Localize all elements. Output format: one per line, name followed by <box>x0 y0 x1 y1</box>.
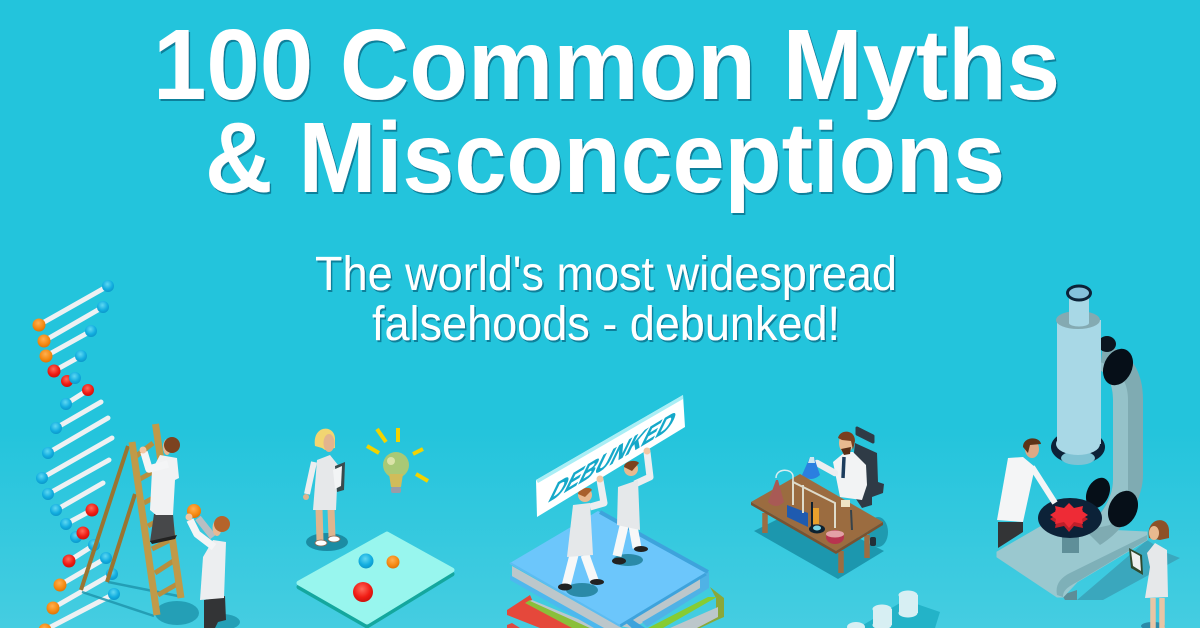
illustration: stack of books <box>507 511 724 628</box>
illustration: lab desk with scientist <box>751 428 888 579</box>
icon: light bulb <box>367 428 428 493</box>
title: 100 Common Myths <box>153 9 1060 121</box>
title: & Misconceptions <box>205 102 1005 214</box>
banner: DEBUNKED sign: DEBUNKED <box>544 403 682 509</box>
illustration: ladder <box>81 424 199 625</box>
illustration: person one holding sign <box>558 480 604 597</box>
illustration: lab equipment <box>847 590 940 628</box>
illustration: woman with clipboard <box>303 429 348 551</box>
illustration: scientist at microscope <box>997 438 1055 548</box>
illustration: scientist on ladder <box>140 437 180 544</box>
subtitle: The world's most widespread <box>315 248 897 301</box>
subtitle <box>315 248 897 351</box>
illustration: woman with notes <box>1129 520 1169 628</box>
illustration: microscope <box>997 284 1180 600</box>
illustration: person two holding sign <box>612 452 650 566</box>
subtitle: falsehoods - debunked! <box>372 298 840 351</box>
illustration: DNA helix <box>32 280 120 628</box>
illustration: scientist holding ball <box>186 504 240 628</box>
title <box>153 9 1060 214</box>
illustration: platform with balls <box>299 534 452 626</box>
